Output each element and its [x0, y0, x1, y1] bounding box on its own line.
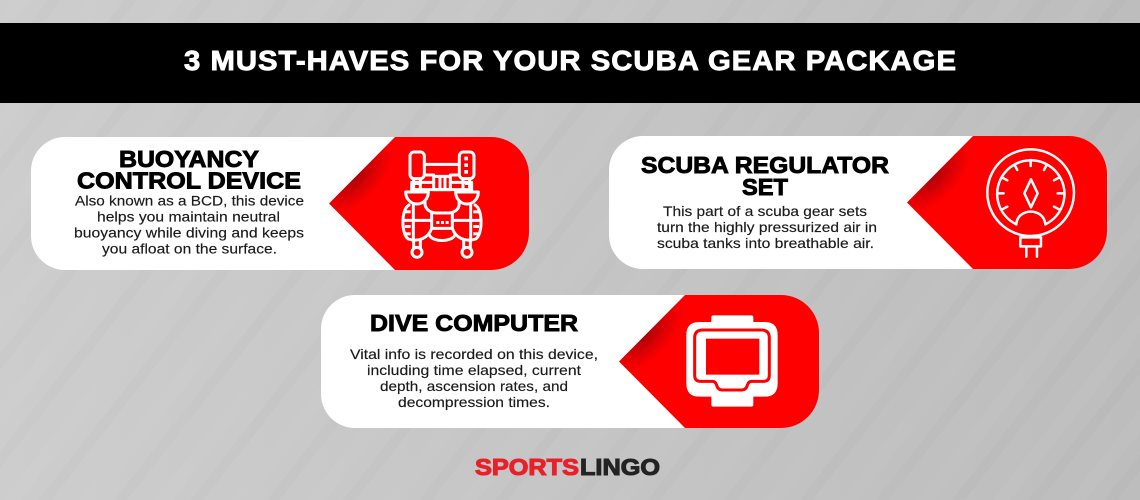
text: buoyancy description: Also known as a BCD, this device: [75, 192, 304, 208]
text: regulator description: scuba tanks into breathable air.: [657, 235, 874, 251]
logo: sportslingo: SPORTS: [475, 454, 579, 480]
text: regulator description: turn the highly pressurized air in: [657, 219, 877, 235]
heading: buoyancy control device: BUOYANCY: [119, 146, 259, 172]
text: buoyancy description: [74, 192, 304, 256]
icon: dive computer watch: [686, 315, 778, 407]
text: dive computer description: Vital info is recorded on this device,: [350, 346, 598, 362]
icon: buoyancy vest: [403, 152, 481, 257]
text: dive computer description: decompression times.: [398, 394, 550, 410]
title banner: 3 MUST-HAVES FOR YOUR SCUBA GEAR PACKAGE: [184, 45, 957, 76]
panel: dive computer: [321, 295, 819, 428]
text: buoyancy description: helps you maintain neutral: [97, 208, 280, 224]
logo: sportslingo: LINGO: [580, 454, 660, 480]
text: dive computer description: including time elapsed, current: [367, 362, 581, 378]
heading: buoyancy control device: CONTROL DEVICE: [77, 168, 301, 194]
panel: scuba regulator set: [609, 136, 1107, 269]
heading: scuba regulator set: SET: [742, 174, 789, 200]
heading: buoyancy control device: [77, 146, 301, 194]
icon: pressure gauge: [987, 149, 1074, 257]
heading: scuba regulator set: [641, 152, 889, 200]
heading: dive computer: DIVE COMPUTER: [370, 310, 578, 336]
text: dive computer description: depth, ascension rates, and: [380, 378, 568, 394]
text: buoyancy description: you afloat on the surface.: [102, 240, 277, 256]
heading: scuba regulator set: SCUBA REGULATOR: [641, 152, 889, 178]
logo: sportslingo: [475, 454, 660, 480]
title banner: [0, 23, 1140, 103]
panel: buoyancy control device: [31, 137, 529, 270]
text: regulator description: This part of a scuba gear sets: [663, 203, 867, 219]
text: buoyancy description: buoyancy while diving and keeps: [74, 224, 304, 240]
text: regulator description: [657, 203, 877, 251]
text: dive computer description: [350, 346, 598, 410]
